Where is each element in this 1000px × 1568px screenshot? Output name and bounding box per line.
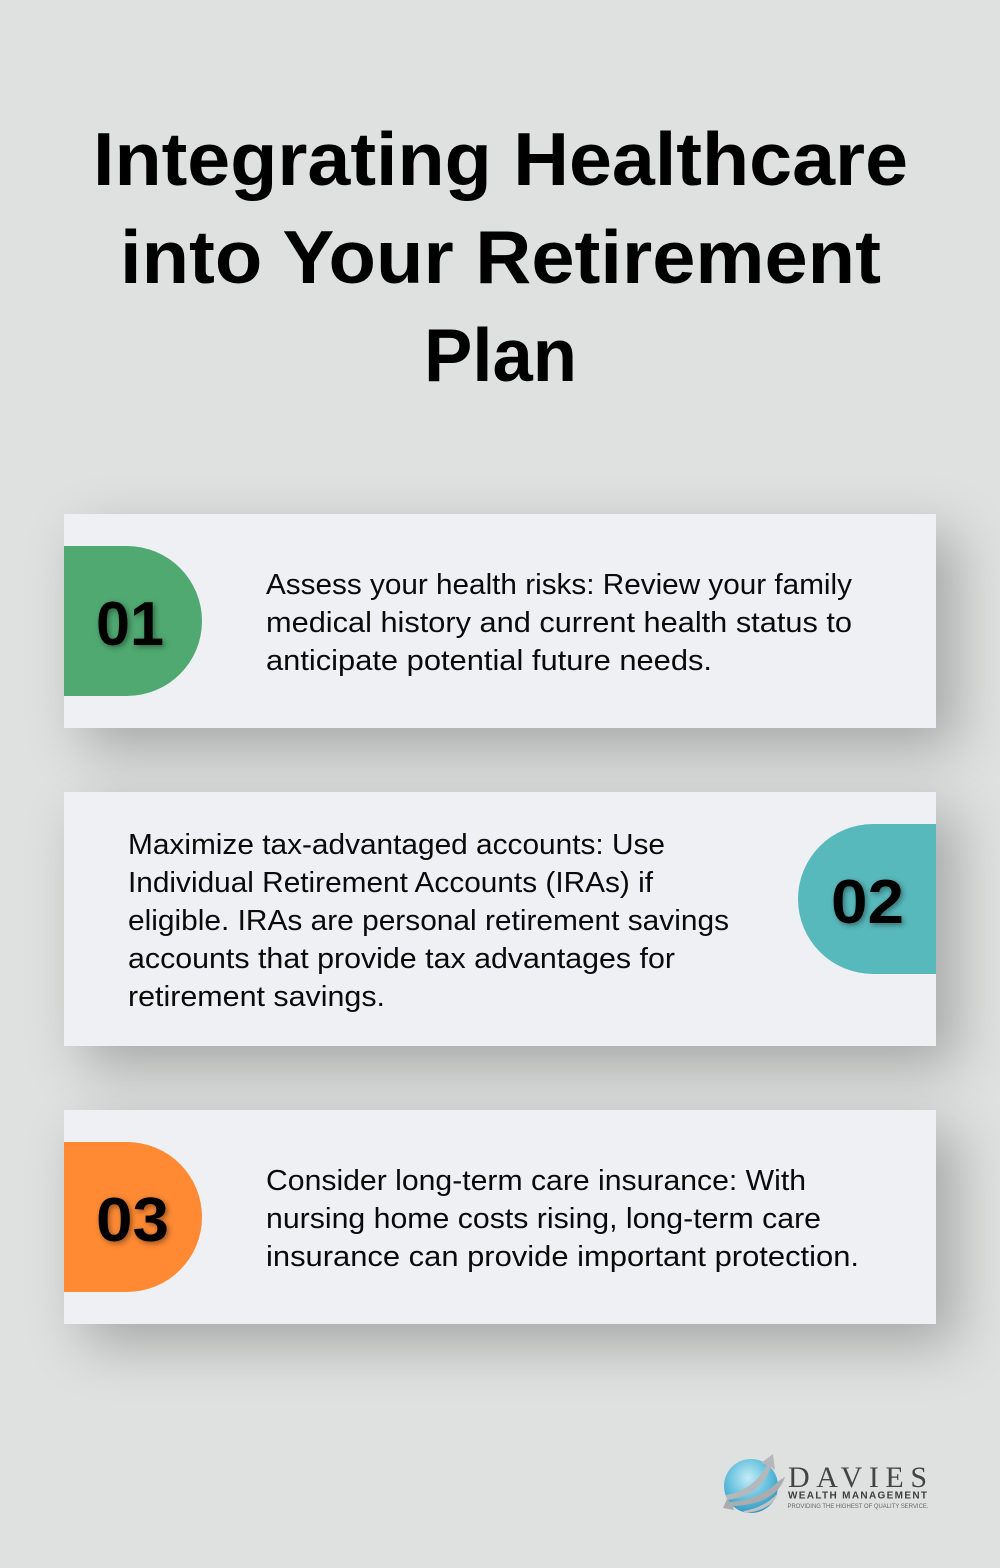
number 01: 01 [96,590,164,659]
text: step 03 description: Consider long-term care insurance: With [266,1165,806,1197]
title: Integrating Healthcare [93,117,908,201]
text: step 02 description: Individual Retirement Accounts (IRAs) if [128,867,654,899]
text: step 02 description [128,829,729,1013]
wordmark: PROVIDING THE HIGHEST OF QUALITY SERVICE. [788,1503,929,1510]
text: step 03 description: insurance can provide important protection. [266,1241,859,1273]
text: step 01 description: anticipate potential future needs. [266,645,712,677]
text: step 01 description: Assess your health risks: Review your family [266,569,852,601]
badge: 03 [64,1142,202,1292]
text: step 01 description [266,569,852,677]
badge: 01 [64,546,202,696]
panel: step 03 [64,1110,936,1324]
text: step 03 description [266,1165,859,1273]
panel: step 01 [64,514,936,728]
number 03: 03 [96,1186,169,1255]
text: step 01 description: medical history and current health status to [266,607,852,639]
icon: globe with arrows [723,1454,785,1513]
wordmark [788,1461,929,1510]
title: Plan [424,313,577,397]
text: step 02 description: retirement savings. [128,981,385,1013]
text: step 02 description: Maximize tax-advantaged accounts: Use [128,829,665,861]
title [93,117,908,397]
panel: step 02 [64,792,936,1046]
text: step 02 description: eligible. IRAs are personal retirement savings [128,905,729,937]
logo: Davies Wealth Management [723,1454,929,1513]
number 02: 02 [831,868,904,937]
title: into Your Retirement [120,215,881,299]
wordmark: DAVIES [788,1461,927,1494]
wordmark: WEALTH MANAGEMENT [788,1490,927,1502]
text: step 02 description: accounts that provide tax advantages for [128,943,675,975]
text: step 03 description: nursing home costs rising, long-term care [266,1203,821,1235]
badge: 02 [798,824,936,974]
